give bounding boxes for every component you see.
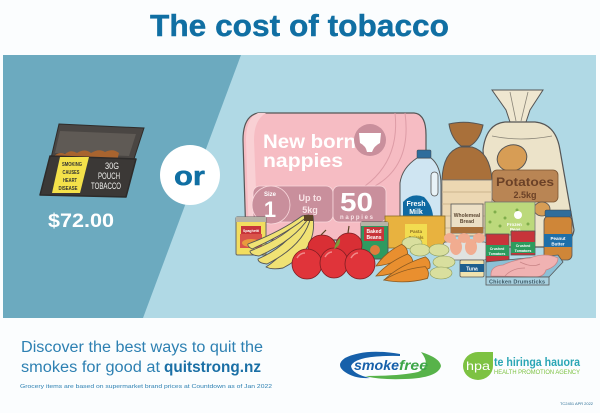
tomato cans: Tomatoes (489, 252, 505, 256)
bread label: Wholemeal (454, 213, 481, 219)
smokefree logo: free (399, 357, 428, 373)
icon: tobacco pouch: DISEASE (58, 186, 78, 192)
tomato cans: Crushed (516, 244, 530, 248)
frozen peas: Frozen (507, 222, 522, 227)
size label (252, 186, 333, 224)
nappies count (333, 186, 386, 222)
tomato cans: Tomatoes (515, 249, 531, 253)
nappies count: 50 (340, 187, 373, 217)
title: The cost of tobacco (150, 8, 449, 43)
size label: 1 (264, 197, 276, 222)
icon: tobacco pouch: HEART (63, 178, 77, 184)
peanut butter jar: Peanut (550, 236, 566, 241)
size label: Size (264, 192, 277, 198)
icon: tobacco pouch: CAUSES (62, 170, 80, 176)
price: $72.00 (48, 211, 114, 232)
bananas (248, 215, 314, 269)
bread label: Bread (460, 219, 474, 225)
peanut butter jar: Butter (551, 242, 565, 246)
frozen peas: Peas (510, 227, 521, 232)
canned fruit: Spaghetti (243, 229, 259, 233)
egg carton (443, 233, 487, 260)
icon: tobacco pouch (40, 124, 144, 197)
milk bottle: Fresh (406, 201, 426, 208)
footnote: Grocery items are based on supermarket brand prices at Countdown as of Jan 2022 (20, 384, 272, 390)
potato sack (477, 90, 574, 247)
tuna can (460, 260, 484, 277)
size label: Up to (298, 193, 322, 203)
apples (292, 226, 375, 279)
Health Promotion Agency logo: te hiringa hauora (494, 355, 580, 369)
or badge: or (174, 161, 206, 191)
potato sack: 2.5kg (513, 190, 537, 200)
nappies pack (243, 113, 426, 240)
smokefree logo: smoke (354, 357, 399, 373)
bread label (451, 204, 483, 233)
Health Promotion Agency logo (463, 352, 580, 380)
frozen peas (485, 202, 535, 235)
tomato cans (486, 231, 535, 265)
Health Promotion Agency logo: hpa (466, 359, 490, 373)
footer message (21, 339, 263, 376)
baked beans can (361, 222, 388, 259)
milk bottle (400, 150, 441, 216)
pasta bag (385, 216, 445, 248)
nappies count: nappies (340, 215, 374, 221)
icon: tobacco pouch: 30G (105, 161, 119, 171)
chicken drumsticks tray: Chicken Drumsticks (489, 280, 545, 286)
panel: tobacco background (3, 55, 241, 318)
smokefree logo (340, 352, 441, 379)
pasta bag: Pasta (410, 229, 422, 234)
tomato cans: Crushed (490, 247, 504, 251)
bread loaf (442, 122, 492, 236)
carrots (373, 237, 455, 286)
chicken drumsticks tray (486, 255, 563, 286)
canned fruit (236, 217, 266, 255)
nappies pack: nappies (263, 151, 343, 172)
peanut butter jar (544, 210, 572, 260)
nappies heading: New born (263, 132, 356, 153)
footer message: smokes for good at (21, 359, 161, 376)
potato sack: Potatoes (496, 175, 554, 189)
footer message: quitstrong.nz (164, 359, 261, 376)
icon: tobacco pouch: TOBACCO (91, 181, 121, 191)
baked beans can: Beans (366, 235, 382, 241)
icon: nappy (354, 124, 386, 156)
panel: groceries background (3, 55, 596, 318)
or badge (160, 145, 220, 205)
print code: TC2451 APR 2022 (560, 401, 594, 406)
size label: 5kg (302, 205, 318, 215)
footer message: Discover the best ways to quit the (21, 339, 263, 356)
tuna can: Tuna (466, 266, 478, 272)
milk bottle: Milk (409, 209, 423, 216)
icon: tobacco pouch: POUCH (98, 171, 120, 181)
baked beans can: Baked (366, 229, 382, 235)
icon: tobacco pouch: SMOKING (62, 162, 82, 168)
Health Promotion Agency logo: HEALTH PROMOTION AGENCY (494, 370, 580, 376)
pasta bag: Spirals (408, 235, 424, 240)
